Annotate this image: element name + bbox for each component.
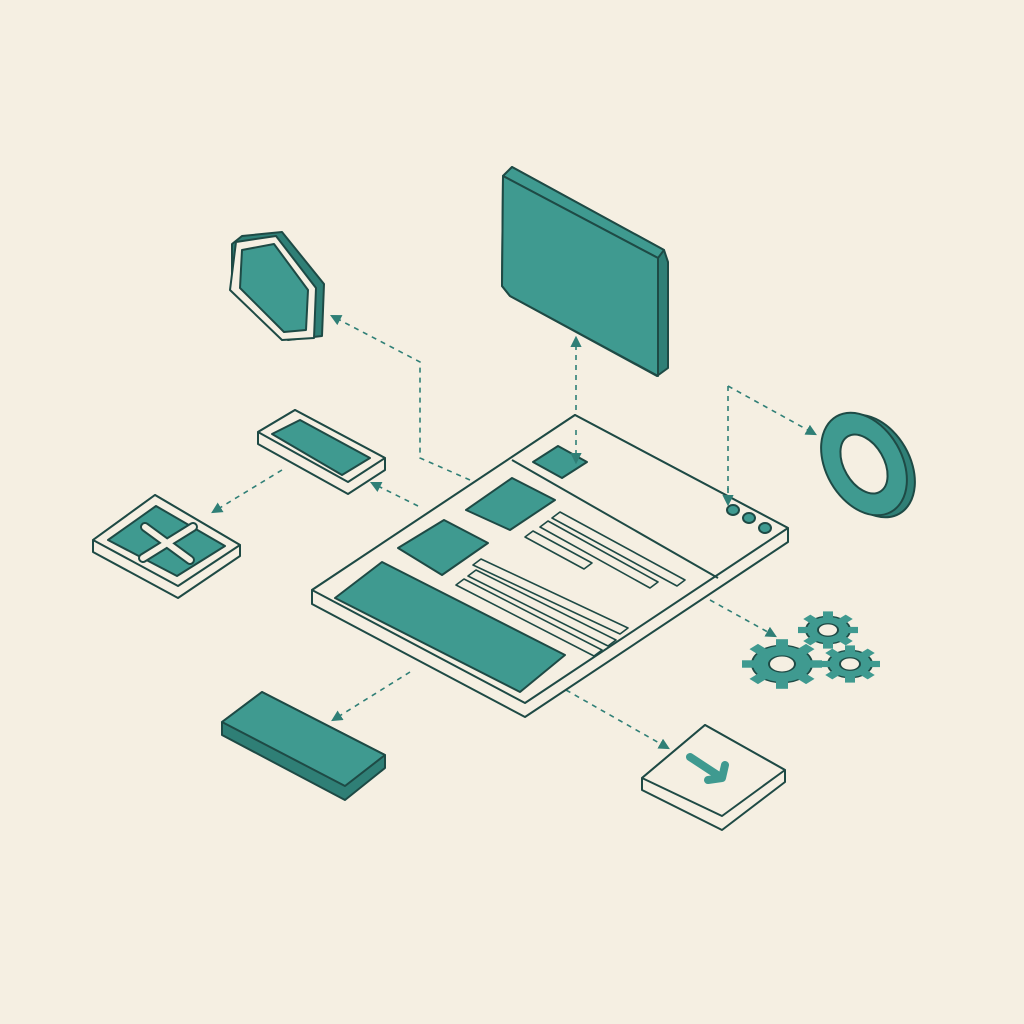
text lines bbox=[456, 512, 685, 656]
arrow tile bbox=[642, 725, 785, 830]
small card bbox=[258, 410, 385, 494]
arrow: to ring bbox=[728, 386, 815, 490]
top teal panel bbox=[502, 167, 668, 376]
arrow: to small card bbox=[372, 483, 418, 506]
window dots bbox=[727, 505, 771, 533]
shield hexagon bbox=[230, 232, 324, 340]
central browser window bbox=[312, 415, 788, 717]
ring bbox=[804, 397, 932, 533]
arrow: card to X tile bbox=[213, 470, 282, 512]
arrow: window to top panel bbox=[575, 338, 577, 470]
arrowheads on window bbox=[576, 430, 728, 504]
arrow: to arrow tile bbox=[566, 690, 668, 748]
header square bbox=[533, 446, 587, 478]
X tile bbox=[93, 495, 240, 598]
icon: arrow bbox=[690, 757, 725, 780]
arrow: to shield bbox=[332, 316, 470, 480]
arrow: to bottom tablet bbox=[333, 672, 410, 720]
bottom tablet bbox=[222, 692, 385, 800]
icon: X bbox=[143, 527, 193, 560]
content blocks bbox=[466, 478, 555, 530]
gears bbox=[742, 611, 880, 689]
arrow: to gears bbox=[710, 600, 775, 636]
